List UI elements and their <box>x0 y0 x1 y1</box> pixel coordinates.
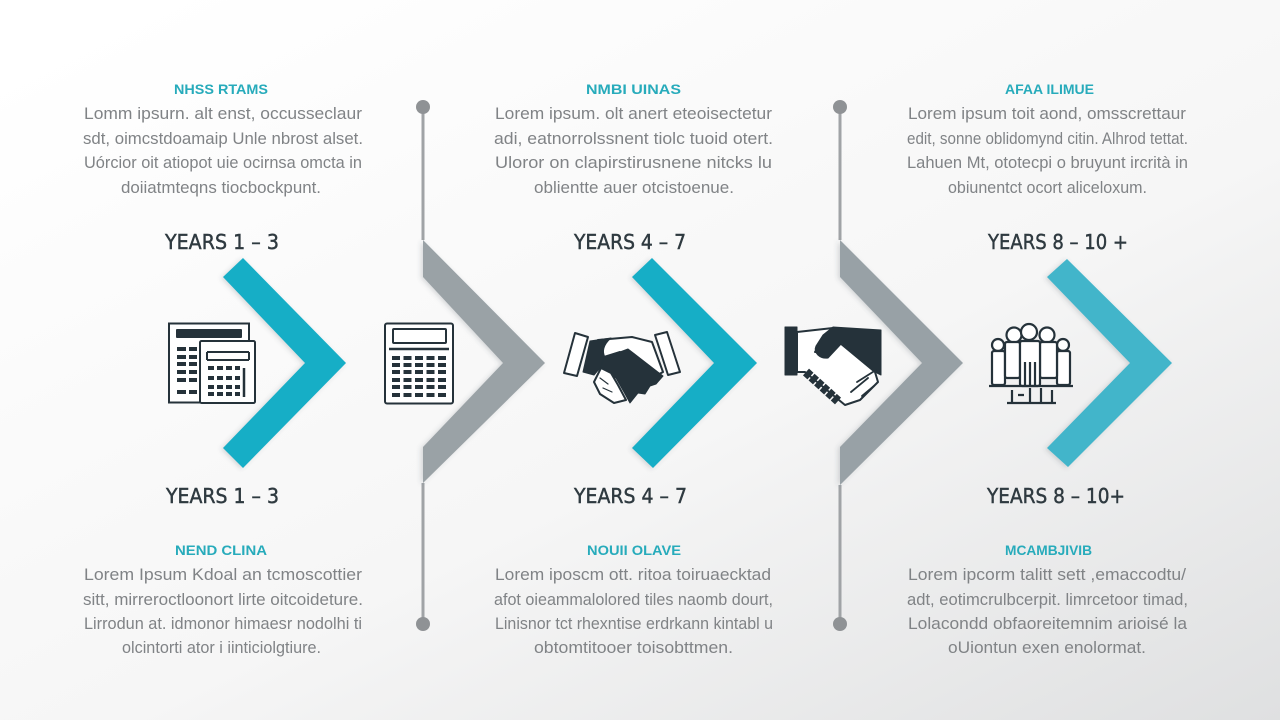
text block: top column 3: obiunentct ocort aliceloxum. <box>948 178 1147 197</box>
year label top 1: YEARS 1 – 3 <box>164 230 279 254</box>
text block: top column 3: AFAA ILIMUE <box>1005 81 1094 97</box>
text block: bottom column 2: NOUII OLAVE <box>587 542 681 558</box>
text block: bottom column 2: obtomtitooer toisobttmen. <box>534 638 733 657</box>
text block: top column 3: edit, sonne oblidomynd citin. Alhrod tettat. <box>907 129 1188 148</box>
icon: group of people <box>989 324 1073 403</box>
divider: second timeline with end dots <box>833 100 847 631</box>
text block: top column 1 <box>83 81 363 197</box>
teal chevron 3 <box>1047 259 1172 467</box>
text block: top column 1: Uórcior oit atiopot uie ocirnsa omcta in <box>84 153 362 172</box>
text block: bottom column 3 <box>907 542 1188 657</box>
text block: top column 2: adi, eatnorrolssnent tiolc tuoid otert. <box>494 129 773 148</box>
icon: handshake left <box>564 332 680 403</box>
text block: top column 2: Uloror on clapirstirusnene nitcks lu <box>495 153 772 172</box>
text block: top column 2 <box>494 81 773 197</box>
year label bottom 2: YEARS 4 – 7 <box>573 484 687 508</box>
teal chevron 1 <box>223 258 346 468</box>
text block: bottom column 3: Lolacondd obfaoreitemnim arioisé la <box>908 614 1188 633</box>
text block: bottom column 3: adt, eotimcrulbcerpit. limrcetoor timad, <box>907 590 1188 609</box>
divider: first timeline with end dots <box>416 100 430 631</box>
teal chevron 2 <box>632 258 757 468</box>
text block: top column 3: Lorem ipsum toit aond, omsscrettaur <box>908 104 1186 123</box>
text block: bottom column 1: sitt, mirreroctloonort lirte oitcoideture. <box>83 590 363 609</box>
year label bottom 3: YEARS 8 – 10+ <box>986 484 1125 508</box>
text block: bottom column 1: Lorem Ipsum Kdoal an tcmoscottier <box>84 565 362 584</box>
text block: top column 3 <box>907 81 1188 197</box>
text block: bottom column 2: Linisnor tct rhexntise erdrkann kintabl u <box>495 614 773 633</box>
text block: bottom column 2 <box>494 542 773 657</box>
icon: handshake right <box>785 327 881 405</box>
text block: top column 2: NMBI UINAS <box>586 81 681 97</box>
text block: bottom column 3: Lorem ipcorm talitt sett ,emaccodtu/ <box>908 565 1186 584</box>
text block: top column 1: doiiatmteqns tiocbockpunt. <box>121 178 321 197</box>
text block: bottom column 1: Lirrodun at. idmonor himaesr nodolhi ti <box>84 614 362 633</box>
text block: bottom column 3: oUiontun exen enolormat. <box>948 638 1146 657</box>
year label top 3: YEARS 8 – 10 + <box>987 230 1128 254</box>
grey chevron 2 <box>840 240 963 485</box>
text block: bottom column 2: afot oieammalolored tiles naomb dourt, <box>494 590 773 609</box>
year label bottom 1: YEARS 1 – 3 <box>165 484 279 508</box>
text block: top column 2: oblientte auer otcistoenue. <box>534 178 734 197</box>
text block: top column 1: NHSS RTAMS <box>174 81 268 97</box>
text block: bottom column 3: MCAMBJIVIB <box>1005 542 1092 558</box>
text block: bottom column 2: Lorem iposcm ott. ritoa toiruaecktad <box>495 565 771 584</box>
text block: bottom column 1: NEND CLINA <box>175 542 267 558</box>
icon: double calculator <box>169 324 255 403</box>
text block: bottom column 1: olcintorti ator i iinticiolgtiure. <box>122 638 321 657</box>
text block: top column 1: sdt, oimcstdoamaip Unle nbrost alset. <box>83 129 363 148</box>
text block: top column 2: Lorem ipsum. olt anert eteoisectetur <box>495 104 772 123</box>
text block: top column 3: Lahuen Mt, ototecpi o bruyunt ircrità in <box>907 153 1188 172</box>
year label top 2: YEARS 4 – 7 <box>573 230 686 254</box>
text block: bottom column 1 <box>83 542 363 657</box>
text block: top column 1: Lomm ipsurn. alt enst, occusseclaur <box>84 104 362 123</box>
grey chevron 1 <box>423 240 545 483</box>
icon: calculator <box>385 324 453 404</box>
